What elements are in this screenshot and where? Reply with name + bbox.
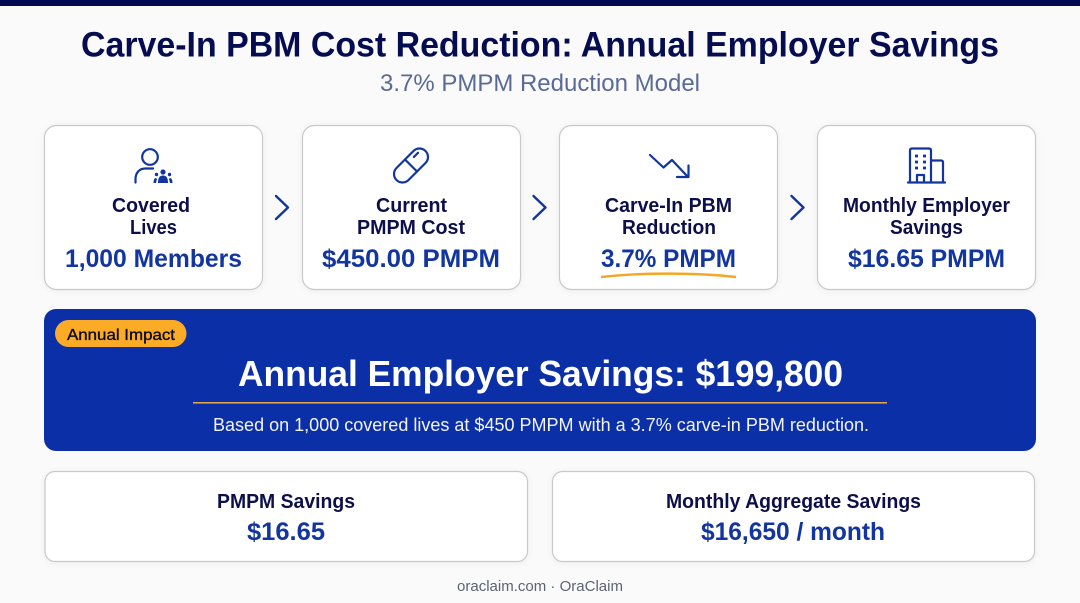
- panel: monthly employer savings: [818, 126, 1036, 290]
- subtitle: 3.7% PMPM Reduction Model: [380, 70, 700, 97]
- badge: annual impact: [55, 320, 186, 347]
- underline: [601, 274, 736, 277]
- footer: oraclaim.com · OraClaim: [457, 578, 623, 595]
- panel: carve-in PBM reduction: [560, 126, 778, 290]
- label: PMPM Savings: [217, 491, 355, 513]
- label: Current: [376, 195, 447, 217]
- panel: covered lives: Lives: [130, 217, 177, 239]
- panel: annual impact banner: [44, 309, 1036, 451]
- value: 3.7% PMPM: [601, 245, 736, 273]
- label: Covered: [112, 195, 190, 217]
- title: Carve-In PBM Cost Reduction: Annual Employer Savings: [81, 26, 999, 64]
- description: Based on 1,000 covered lives at $450 PMPM with a 3.7% carve-in PBM reduction.: [213, 415, 869, 435]
- value: 1,000 Members: [65, 245, 242, 273]
- icon: pill: [390, 145, 432, 186]
- value: $16.65 PMPM: [848, 245, 1005, 273]
- label: Carve-In PBM: [605, 195, 732, 217]
- label: Monthly Employer: [843, 195, 1010, 217]
- panel: monthly aggregate savings: [552, 472, 1034, 562]
- label: Monthly Aggregate Savings: [666, 491, 921, 513]
- icon: building: [908, 148, 945, 182]
- top bar: [0, 0, 1080, 6]
- value: $16.65: [247, 518, 325, 546]
- value: $450.00 PMPM: [322, 245, 500, 273]
- headline: Annual Employer Savings: $199,800: [238, 353, 843, 394]
- arrow: [276, 196, 288, 219]
- panel: current PMPM cost: PMPM Cost: [357, 217, 465, 239]
- value: $16,650 / month: [701, 518, 885, 546]
- icon: person with group: [136, 149, 172, 183]
- panel: PMPM savings: [45, 472, 528, 562]
- panel: covered lives: [44, 126, 262, 290]
- arrow: [534, 196, 546, 219]
- arrow: [792, 196, 804, 219]
- badge: annual impact: Annual Impact: [67, 327, 176, 344]
- icon: trend down: [650, 155, 688, 177]
- panel: monthly employer savings: Savings: [890, 217, 963, 239]
- panel: carve-in PBM reduction: Reduction: [622, 217, 716, 239]
- panel: current PMPM cost: [302, 126, 520, 290]
